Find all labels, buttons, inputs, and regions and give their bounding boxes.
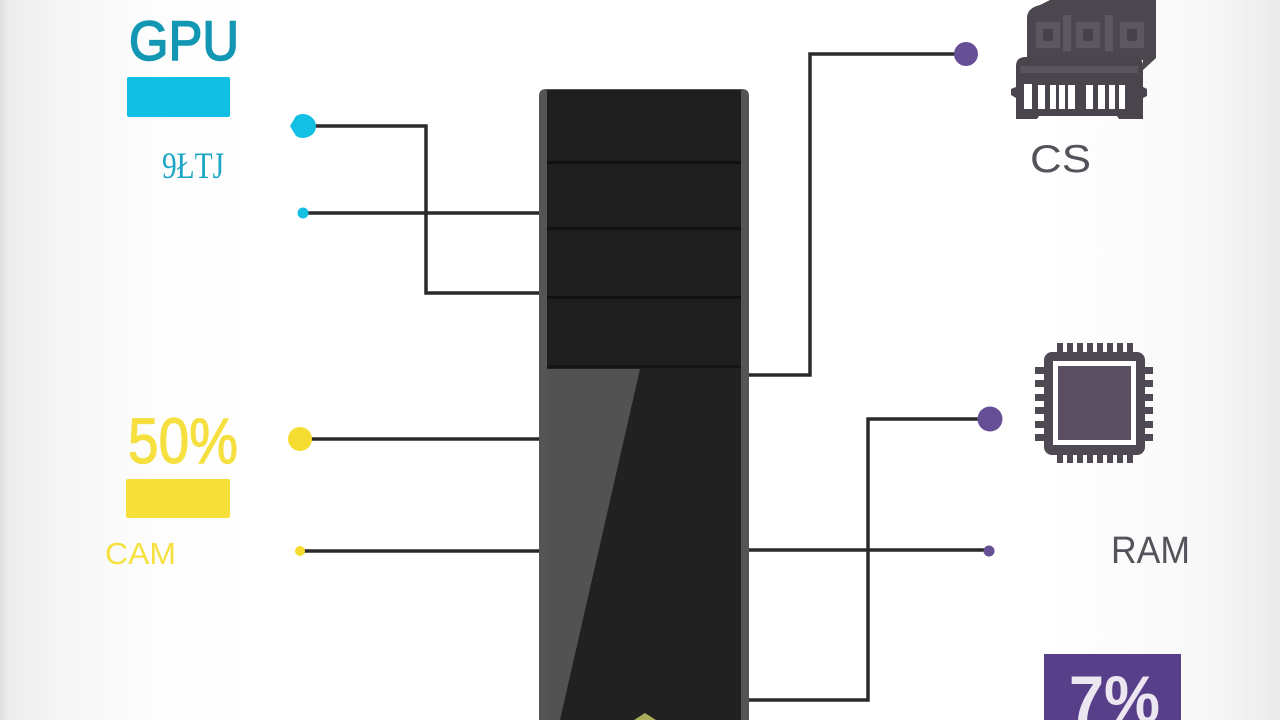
purple percentage panel: [1044, 654, 1181, 720]
RAM label: RAM: [1111, 530, 1190, 572]
tower highlight: [547, 369, 640, 720]
CAM label: CAM: [105, 536, 176, 571]
yellow bar: [126, 479, 230, 518]
GPU label: GPU: [129, 9, 239, 72]
garbled cyan label: 9ŁTJ: [162, 146, 224, 187]
GPU bar: [127, 77, 230, 117]
connector dots: [288, 42, 1002, 556]
icon: cpu chip: [1035, 343, 1153, 463]
connector lines: [300, 54, 990, 700]
computer tower: [539, 89, 749, 720]
50% label: 50%: [128, 405, 238, 477]
tower bays: [547, 90, 741, 368]
icon: memory module: [1011, 0, 1156, 119]
CSI label: CS: [1030, 138, 1091, 181]
tower power indicator: [634, 713, 656, 720]
